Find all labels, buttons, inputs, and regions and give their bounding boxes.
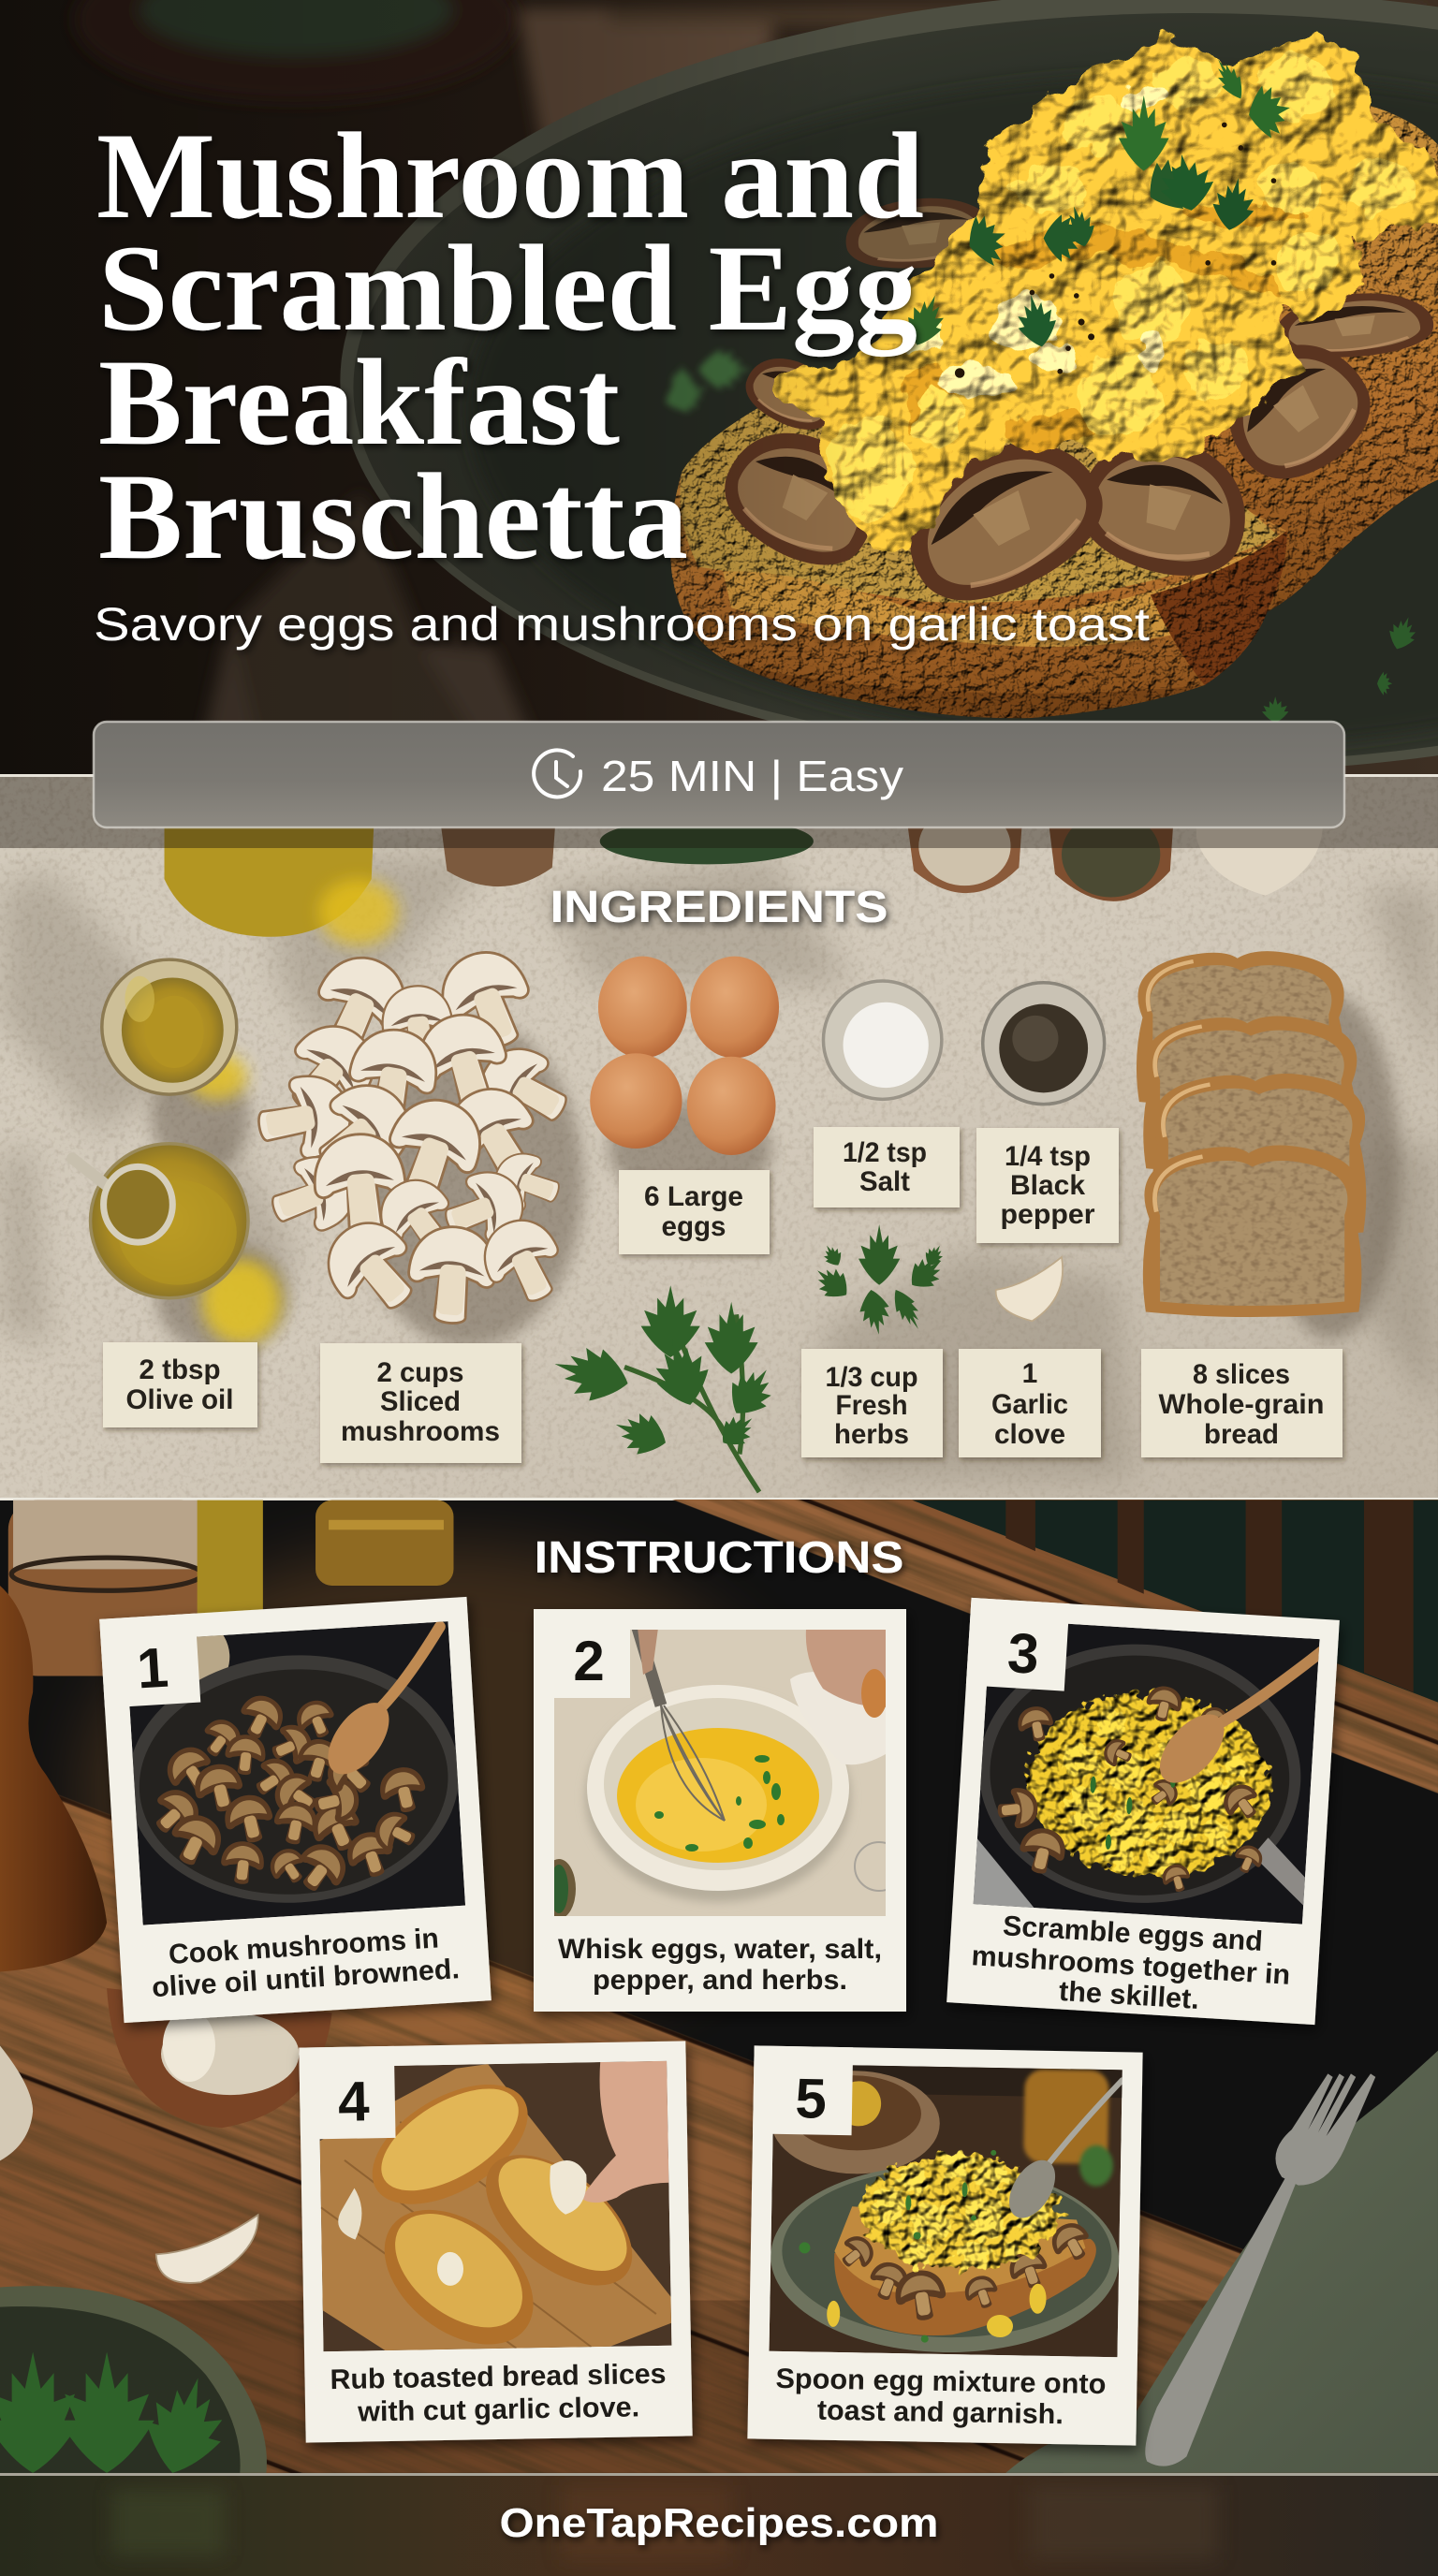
stone counter scene <box>0 776 1438 1499</box>
chair slats <box>1005 1500 1414 1692</box>
table wood patches <box>202 0 962 721</box>
footer site name: OneTapRecipes.com <box>500 2500 938 2546</box>
step 3 number tab <box>966 1598 1069 1691</box>
green herb bowl <box>0 2286 267 2483</box>
hero title: Mushroom and <box>96 107 924 244</box>
top background props <box>165 805 398 944</box>
label: eggs: 6 Large <box>644 1181 743 1212</box>
step 3 text <box>969 1909 1293 2021</box>
label: salt: 1/2 tsp <box>843 1137 927 1168</box>
green leaf prop <box>600 818 814 864</box>
step 2 text: pepper, and herbs. <box>593 1965 847 1996</box>
step 5 text <box>775 2364 1107 2431</box>
warm light glow <box>82 1544 805 2038</box>
label: eggs <box>619 1170 770 1254</box>
dark room backdrop <box>912 1500 1438 1703</box>
label: bread <box>1141 1349 1343 1457</box>
step 4 number tab <box>299 2046 396 2140</box>
step 1 number tab: 1 <box>135 1636 170 1700</box>
time text: 25 MIN | Easy <box>601 752 903 800</box>
silver fork <box>1145 2073 1375 2466</box>
pepper mill <box>0 1586 107 1971</box>
hero title: Scrambled Egg <box>98 219 917 357</box>
step card 3 <box>946 1598 1340 2025</box>
oil bottles <box>198 1500 453 1616</box>
step 3 text: mushrooms together in <box>971 1940 1291 1991</box>
label: olive oil: Olive oil <box>125 1384 234 1415</box>
back toast <box>1204 106 1438 611</box>
hero title: Bruschetta <box>98 447 688 585</box>
icon: clock <box>534 750 580 797</box>
step 1 photo: mushrooms in pan <box>114 1594 467 1925</box>
step 4 text: Rub toasted bread slices <box>330 2359 667 2395</box>
label: black pepper <box>976 1128 1119 1243</box>
chopped herbs <box>808 1224 950 1337</box>
dim strip behind badge <box>0 775 1438 848</box>
label: salt <box>814 1127 960 1208</box>
label: garlic clove: Garlic <box>991 1389 1068 1420</box>
label: bread: Whole-grain <box>1159 1389 1324 1420</box>
label: olive oil: 2 tbsp <box>139 1354 221 1385</box>
step 5 photo: plated toast <box>768 2064 1123 2357</box>
salt wood bowl <box>907 807 1022 893</box>
herb garnish <box>901 54 1421 723</box>
label: mushrooms: Sliced <box>380 1386 461 1417</box>
dark plate <box>340 0 1438 772</box>
step 4 photo: rubbing garlic on toast <box>318 2056 672 2375</box>
label: mushrooms: 2 cups <box>376 1357 464 1388</box>
seared mushrooms <box>725 198 1434 601</box>
step 4 number tab: 4 <box>338 2070 371 2133</box>
step 2 photo: whisking eggs <box>542 1628 903 1919</box>
step 5 text: toast and garnish. <box>817 2395 1064 2430</box>
scrambled eggs <box>785 37 1438 549</box>
label: garlic clove <box>959 1349 1101 1457</box>
pepper bowl <box>983 983 1105 1105</box>
label: bread: bread <box>1204 1419 1279 1450</box>
top oil jar <box>165 805 374 937</box>
step 2 number tab: 2 <box>573 1630 605 1692</box>
step 3 text: the skillet. <box>1058 1976 1200 2015</box>
garlic bulb prop <box>1196 822 1323 896</box>
step 4 text: with cut garlic clove. <box>357 2392 639 2428</box>
hero panel <box>0 0 1438 776</box>
label: fresh herbs: Fresh <box>835 1390 908 1421</box>
footer band <box>0 2473 1438 2576</box>
hero subtitle: Savory eggs and mushrooms on garlic toast <box>94 598 1150 651</box>
wooden stack <box>440 822 555 886</box>
step 5 number tab <box>753 2045 853 2135</box>
garlic left edge <box>0 2045 33 2160</box>
garlic bowl <box>107 1988 332 2128</box>
step card 2 <box>534 1609 906 2012</box>
step 2 text: Whisk eggs, water, salt, <box>558 1934 882 1965</box>
step 3 number tab: 3 <box>1005 1621 1041 1686</box>
plank vignette <box>0 2301 1438 2473</box>
ingredients heading: INGREDIENTS <box>550 883 888 932</box>
green linen cloth <box>1005 2051 1438 2473</box>
panel: ingredients <box>0 775 1438 1499</box>
step 1 number tab <box>99 1614 200 1708</box>
rustic table scene <box>0 1499 1438 2483</box>
panel: instructions <box>0 1499 1438 2483</box>
background bowl <box>78 0 457 95</box>
step 4 text <box>330 2359 667 2428</box>
label: fresh herbs: herbs <box>834 1419 909 1450</box>
step card 5 <box>747 2045 1143 2446</box>
divider line: ingredients <box>0 1498 1438 1500</box>
glass jar <box>8 1500 209 1676</box>
garlic clove on table <box>156 2215 258 2283</box>
step 1 text: olive oil until browned. <box>151 1954 461 2003</box>
oil jug <box>72 1144 281 1344</box>
label: black pepper: 1/4 tsp <box>1005 1141 1091 1172</box>
eggs <box>590 957 779 1155</box>
step 2 text <box>558 1934 882 1996</box>
salt bowl <box>823 981 942 1099</box>
step card 1 <box>99 1593 492 2023</box>
label: garlic clove: 1 <box>1022 1358 1037 1389</box>
step 1 text: Cook mushrooms in <box>168 1923 440 1970</box>
label: eggs: eggs <box>661 1211 726 1242</box>
diagonal window shadows <box>0 855 1438 1479</box>
label: garlic clove: clove <box>994 1419 1065 1450</box>
label: bread: 8 slices <box>1193 1359 1290 1390</box>
wooden table planks <box>0 1499 1438 2473</box>
object drop shadows <box>151 994 1401 1354</box>
instructions heading: INSTRUCTIONS <box>534 1533 904 1583</box>
pepper wood bowl <box>1049 812 1173 901</box>
label: salt: Salt <box>859 1166 910 1197</box>
whole-grain bread slices <box>1137 951 1366 1317</box>
front toast <box>670 394 1287 718</box>
step 5 text: Spoon egg mixture onto <box>775 2364 1107 2400</box>
fresh parsley <box>548 1285 784 1492</box>
step 5 number tab: 5 <box>795 2067 827 2130</box>
left shadow gradient <box>64 0 814 721</box>
hero title <box>96 107 924 585</box>
sliced raw mushrooms <box>252 941 581 1329</box>
footer blurred reflections <box>112 2485 1217 2560</box>
black pepper flecks <box>955 121 1276 378</box>
garlic clove <box>996 1257 1063 1321</box>
oil bowl <box>102 959 246 1099</box>
label: black pepper: pepper <box>1000 1199 1095 1230</box>
step 3 photo: scramble in skillet <box>971 1618 1323 1925</box>
step 2 number tab <box>534 1609 630 1698</box>
blurred herb on plate <box>663 348 749 415</box>
step card 4 <box>299 2041 693 2443</box>
label: fresh herbs: 1/3 cup <box>826 1362 917 1393</box>
time and difficulty badge <box>94 722 1344 827</box>
step 3 text: Scramble eggs and <box>1002 1910 1264 1957</box>
step 1 text <box>149 1922 461 2003</box>
hero photo scene <box>0 0 1438 776</box>
hero title: Breakfast <box>98 333 620 471</box>
label: mushrooms <box>320 1343 521 1463</box>
label: olive oil <box>103 1342 257 1427</box>
label: black pepper: Black <box>1010 1170 1085 1201</box>
divider line: hero <box>0 774 1438 777</box>
label: mushrooms: mushrooms <box>341 1416 500 1447</box>
label: fresh herbs <box>801 1349 943 1457</box>
